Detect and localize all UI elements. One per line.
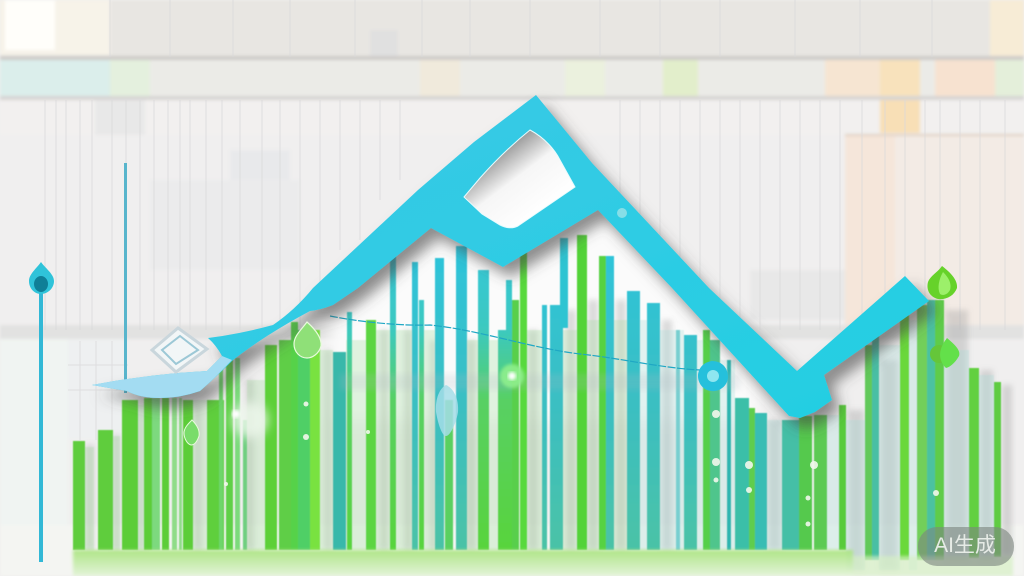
sparkle dots on bars [224, 208, 939, 526]
ribbon peak opening [464, 130, 575, 228]
icon: green leaf lower right [930, 338, 959, 368]
icon: left axis pin [29, 262, 54, 562]
icon: blue blob marker [698, 361, 728, 391]
floor glow under bars [73, 550, 1013, 576]
icon: diamond frame [152, 328, 207, 372]
bar chart: green and teal bars [73, 235, 1012, 570]
icon: glowing green dot [500, 364, 524, 388]
badge: AI generated [918, 527, 1014, 566]
thin dotted trend line [330, 316, 700, 370]
ribbon tail highlight [92, 356, 232, 398]
pale translucent bars in the gaps [85, 320, 627, 550]
bars [73, 235, 1001, 560]
white glow under peak [330, 130, 760, 420]
glow: bright spot [232, 402, 268, 438]
bar shadows [86, 300, 1012, 570]
window-like stripes [45, 0, 1005, 440]
main blue ribbon line with shadow [92, 95, 929, 418]
badge label: AI生成 [934, 534, 996, 557]
icon: green leaf marker [294, 322, 321, 358]
grey band across bars [340, 374, 740, 390]
icon: small green leaf [184, 420, 199, 445]
icon: green leaf top right [927, 266, 957, 299]
icon: pale blue drop [436, 385, 458, 436]
vertical axis line [124, 163, 127, 393]
